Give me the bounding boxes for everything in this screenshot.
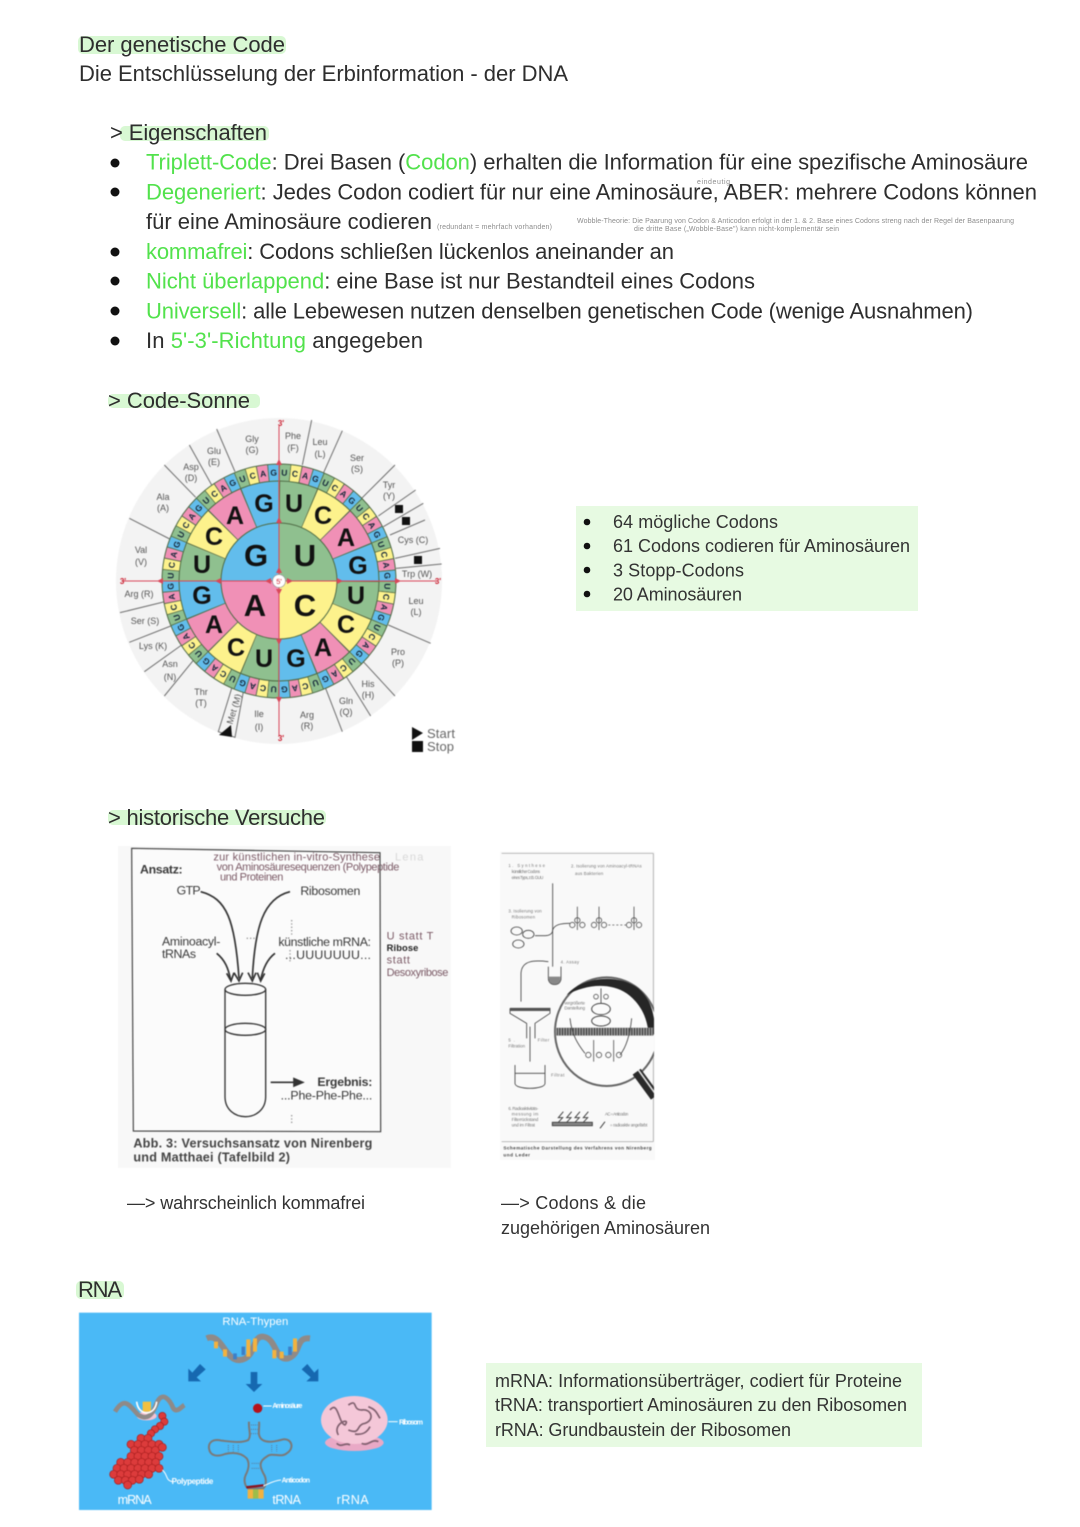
list: properties of the code: [110, 150, 1037, 353]
procedure labels: 6. Radioaktivitäts-: [508, 1106, 539, 1111]
amino acid labels: (R): [301, 721, 313, 731]
speckles: [247, 920, 292, 1123]
tRNA cloverleaf: Anticodon: [282, 1477, 310, 1484]
third base letters: A: [166, 593, 177, 601]
axis cross: 3': [120, 577, 126, 586]
third base letters: [165, 467, 393, 695]
amino acid labels: Met (M): [225, 693, 243, 725]
amino acid labels: (L): [314, 449, 326, 459]
tRNA symbols: [570, 907, 642, 930]
amino acid labels: Tyr: [383, 480, 395, 490]
second base letters: C: [227, 634, 245, 662]
experiment labels: ...Phe-Phe-Phe...: [281, 1089, 372, 1103]
third base letters: C: [360, 511, 372, 522]
third base letters: A: [381, 561, 392, 569]
axis cross: 3': [278, 734, 284, 743]
handwritten note on synthesis: von Aminosäuresequenzen (Polypeptide: [217, 862, 399, 874]
third base letters: A: [186, 511, 198, 522]
third base letters: C: [218, 668, 228, 680]
third base letters: G: [280, 684, 288, 695]
handwritten note on synthesis: zur künstlichen in-vitro-Synthese: [213, 852, 380, 864]
panel: codon counts: 20 Aminosäuren: [613, 584, 742, 604]
third base letters: A: [291, 683, 299, 694]
amino acid labels: (T): [195, 698, 207, 708]
heading: historische Versuche: > historische Versuche: [108, 805, 325, 830]
figure caption: Abb. 3: Versuchsansatz von Nirenberg: [133, 1136, 372, 1150]
third base letters: C: [166, 561, 177, 569]
experiment labels: Ergebnis:: [317, 1075, 372, 1089]
procedure labels: [503, 863, 652, 1157]
amino acid labels: Leu: [408, 596, 424, 606]
rRNA ribosome: Ribosom: [399, 1418, 423, 1427]
amino acid labels: (F): [287, 443, 299, 453]
amino acid labels: Thr: [194, 687, 208, 697]
magnifying glass: [555, 977, 658, 1097]
third base letters: G: [371, 529, 383, 540]
second base letters: G: [192, 582, 212, 610]
tRNA cloverleaf: [209, 1403, 310, 1499]
labels: mRNA, tRNA, rRNA: rRNA: [337, 1493, 369, 1507]
handwritten note: ribose: U statt T: [387, 930, 434, 942]
third base letters: G: [193, 502, 205, 514]
procedure labels: messung im: [512, 1112, 539, 1117]
mRNA with ribosome and polypeptide: [110, 1397, 214, 1489]
list: properties of the code: Nicht überlappend: eine Base ist nur Bestandteil eines Codons: [146, 268, 755, 294]
second base letters: A: [314, 634, 332, 662]
labels: mRNA, tRNA, rRNA: mRNA: [118, 1493, 152, 1507]
third base letters: G: [375, 613, 387, 623]
third base letters: G: [270, 467, 278, 478]
panel: codon counts: 64 mögliche Codons: [613, 512, 778, 532]
third base letters: C: [330, 482, 340, 494]
third base letters: U: [320, 477, 330, 489]
legend: start and stop: [412, 726, 455, 754]
experiment labels: Ansatz:: [140, 862, 183, 876]
panel: RNA types: tRNA: transportiert Aminosäuren zu den Ribosomen: [495, 1395, 907, 1415]
procedure labels: Filtrat: [551, 1072, 565, 1077]
third base letters: C: [259, 683, 267, 694]
axis cross: 3': [435, 577, 441, 586]
third base letters: C: [379, 550, 390, 559]
experiment labels: Aminoacyl-: [162, 934, 220, 948]
procedure labels: und Leder: [503, 1152, 530, 1157]
subtitle: Die Entschlüsselung der Erbinformation - der DNA: [79, 61, 568, 86]
panel: codon counts: [576, 506, 918, 611]
arrow note: kommafrei: —> wahrscheinlich kommafrei: [127, 1193, 365, 1213]
handwritten note: ribose: Ribose: [387, 943, 418, 953]
RNA strand: [207, 1337, 310, 1360]
third base letters: U: [228, 673, 238, 685]
third base letters: C: [248, 470, 257, 481]
amino acid labels: (A): [157, 503, 169, 513]
procedure labels: Filterrückstand: [512, 1117, 539, 1122]
handwritten note: ribose: [387, 930, 448, 979]
experiment labels: künstliche mRNA:: [278, 935, 371, 949]
procedure labels: 3. Isolierung von: [508, 908, 542, 913]
third base letters: C: [291, 468, 299, 479]
mRNA with ribosome and polypeptide: Polypeptide: [172, 1477, 214, 1486]
amino acid labels: Gln: [339, 696, 353, 706]
handwritten note on synthesis: [213, 852, 424, 884]
amino acid labels: Arg: [300, 710, 314, 720]
handwritten notes: [437, 179, 1014, 233]
first base letters: [244, 538, 316, 623]
labels: mRNA, tRNA, rRNA: tRNA: [272, 1493, 302, 1507]
third base letters: G: [227, 477, 238, 489]
amino acid labels: (Y): [383, 491, 395, 501]
labels: mRNA, tRNA, rRNA: [118, 1493, 369, 1507]
second base letters: G: [254, 490, 274, 518]
outer amino acid dividers: [120, 420, 442, 737]
third base letters: A: [379, 603, 390, 612]
amino acid labels: (L): [410, 607, 422, 617]
third base letters: U: [375, 540, 387, 549]
third base letters: C: [366, 632, 378, 642]
third base letters: G: [311, 473, 321, 485]
amino acid labels: Cys (C): [398, 535, 428, 545]
third base letters: G: [175, 622, 187, 633]
third base letters: G: [237, 677, 247, 689]
chart: code sun: [116, 418, 455, 754]
amino acid labels: (H): [362, 690, 374, 700]
procedure labels: eines Typs, z.B. GUU: [512, 875, 543, 880]
second base letters: A: [205, 611, 223, 639]
third base letters: U: [175, 530, 187, 540]
handwritten notes: eindeutig: [697, 179, 730, 186]
third base letters: C: [180, 520, 192, 530]
third base letters: U: [193, 648, 204, 660]
third base letters: G: [171, 539, 183, 549]
third base letters: A: [259, 468, 267, 479]
procedure labels: künstlicher Codons: [512, 869, 540, 874]
third base letters: U: [281, 467, 288, 478]
procedure labels: 4. Assay: [561, 960, 580, 965]
amino acid labels: His: [362, 679, 375, 689]
test tube: [225, 983, 266, 1117]
axis cross: [120, 419, 441, 743]
axis cross: 3': [278, 419, 284, 428]
procedure labels: Filter: [538, 1038, 550, 1043]
amino acid labels: Ile: [254, 709, 264, 719]
experiment labels: ...UUUUUUU...: [285, 948, 371, 962]
rings: [162, 464, 396, 698]
amino acid labels: [124, 431, 432, 737]
third base letters: A: [301, 470, 310, 481]
second base letters: G: [286, 645, 306, 673]
radioactive measurement: [552, 1112, 605, 1128]
figure: Nirenberg and Matthaei experiment: [118, 846, 451, 1168]
procedure labels: = radioaktiv angefärbt: [610, 1123, 648, 1128]
third base letters: C: [338, 662, 349, 674]
panel: RNA types: mRNA: Informationsüberträger, codiert für Proteine: [495, 1371, 902, 1391]
amino acid labels: (D): [185, 473, 197, 483]
third base letters: U: [311, 677, 320, 689]
list: properties of the code: kommafrei: Codons schließen lückenlos aneinander an: [146, 239, 674, 264]
amino acid labels: Ala: [156, 492, 170, 502]
list: properties of the code: Degeneriert: Jedes Codon codiert für nur eine Aminosäure, ABER: mehrere Codons können: [146, 180, 1037, 204]
third base letters: A: [180, 632, 192, 642]
second base letters: C: [314, 502, 332, 530]
arrow note: codons and amino acids: zugehörigen Aminosäuren: [501, 1218, 710, 1238]
amino acid labels: Trp (W): [402, 569, 432, 579]
amino acid labels: Gly: [245, 434, 259, 444]
amino acid labels: (G): [246, 445, 258, 455]
second base letters: U: [255, 645, 273, 673]
panel: RNA types: [486, 1363, 922, 1447]
third base letters: C: [301, 681, 310, 692]
amino acid labels: (S): [351, 464, 363, 474]
second base letters: C: [205, 523, 223, 551]
first base letters: U: [294, 538, 316, 573]
amino acid labels: (E): [208, 457, 220, 467]
amino acid labels: Asn: [162, 659, 178, 669]
handwritten note on synthesis: Lena: [395, 852, 424, 864]
procedure labels: AC = Anticodon: [605, 1112, 629, 1117]
amino acid labels: Lys (K): [139, 641, 167, 651]
second base letters: A: [226, 502, 244, 530]
third base letters: G: [320, 673, 331, 685]
third base letters: C: [209, 488, 220, 500]
figure caption: und Matthaei (Tafelbild 2): [133, 1151, 290, 1165]
procedure labels: 2. Isolierung von Aminoacyl-tRNAs: [571, 864, 642, 869]
handwritten note on synthesis: und Proteinen: [220, 872, 283, 884]
third base letters: A: [209, 662, 220, 674]
handwritten note: ribose: statt: [387, 954, 410, 966]
handwritten notes: Wobble-Theorie: Die Paarung von Codon & Anticodon erfolgt in der 1. & 2. Base eines Codons streng nach der Regel der Basenpaarung: [577, 218, 1014, 225]
third base letters: U: [200, 495, 212, 506]
third base letters: A: [360, 640, 372, 651]
experiment labels: GTP: [177, 883, 201, 897]
second base letters: [192, 490, 368, 673]
arrow note: codons and amino acids: [501, 1193, 710, 1238]
third base letters: U: [346, 656, 358, 667]
amino acid labels: Arg (R): [124, 589, 154, 599]
third base letters: A: [330, 668, 340, 680]
panel: RNA types: rRNA: Grundbaustein der Ribosomen: [495, 1420, 791, 1440]
amino acid labels: (I): [255, 722, 263, 732]
amino acid labels: (P): [392, 658, 404, 668]
figure: Nirenberg and Leder procedure: [500, 852, 658, 1160]
procedure labels: 5.: [508, 1038, 515, 1043]
third base letters: A: [248, 681, 257, 692]
label: RNA types: RNA-Thypen: [222, 1316, 288, 1328]
first base letters: C: [294, 588, 316, 623]
third base letters: G: [346, 495, 358, 507]
amino acid labels: Val: [135, 545, 147, 555]
procedure labels: 1. Synthese: [508, 863, 546, 868]
magnifying glass: Darstellung: [564, 1006, 586, 1011]
third base letters: C: [381, 593, 392, 601]
panel: codon counts: 61 Codons codieren für Aminosäuren: [613, 536, 910, 556]
third base letters: G: [165, 582, 176, 590]
second base letters: U: [285, 490, 303, 518]
magnifying glass: vergrößerte: [564, 1000, 586, 1005]
amino acid labels: Leu: [312, 437, 328, 447]
procedure labels: aus Bakterien: [575, 871, 604, 876]
procedure labels: Schematische Darstellung des Verfahrens von Nirenberg: [503, 1146, 652, 1151]
second base letters: A: [337, 524, 355, 552]
list: properties of the code: Universell: alle Lebewesen nutzen denselben genetischen Code (wenige Ausnahmen): [146, 298, 973, 324]
arrow note: codons and amino acids: —> Codons & die: [501, 1193, 646, 1213]
experiment labels: tRNAs: [162, 947, 196, 961]
third base letters: U: [371, 622, 383, 632]
third base letters: C: [168, 603, 179, 612]
amino acid labels: Phe: [285, 431, 301, 441]
flow lines and glassware: [510, 883, 570, 1088]
list: properties of the code: Triplett-Code: Drei Basen (Codon) erhalten die Information für eine spezifische Aminosäure: [146, 150, 1028, 174]
second base letters: U: [347, 582, 365, 610]
axis cross: 5': [276, 577, 282, 586]
curved arrows into tube: [201, 892, 303, 1086]
panel: codon counts: 3 Stopp-Codons: [613, 560, 744, 580]
experiment labels: [140, 862, 372, 1103]
third base letters: A: [168, 550, 179, 559]
rRNA ribosome: [321, 1396, 423, 1451]
title: Der genetische Code: [79, 32, 285, 57]
list: properties of the code: für eine Aminosäure codieren: [146, 209, 432, 234]
handwritten note: ribose: Desoxyribose: [387, 967, 448, 979]
legend: start and stop: Start: [427, 726, 455, 741]
figure caption: [133, 1136, 372, 1165]
third base letters: U: [354, 502, 365, 514]
handwritten notes: die dritte Base („Wobble-Base") kann nicht-komplementär sein: [634, 226, 839, 233]
third base letters: G: [382, 572, 393, 580]
third base letters: U: [382, 583, 393, 590]
procedure labels: Ribosomen: [512, 914, 536, 919]
procedure labels: und im Filtrat: [512, 1123, 536, 1128]
third base letters: G: [200, 655, 212, 667]
amino acid labels: (Q): [340, 707, 352, 717]
tRNA cloverleaf: Aminosäure: [272, 1403, 302, 1410]
third base letters: U: [165, 572, 176, 579]
arrows to the three RNA types: [188, 1364, 318, 1392]
amino acid labels: Ser (S): [131, 616, 159, 626]
second base letters: U: [193, 551, 211, 579]
amino acid labels: Glu: [207, 446, 221, 456]
third base letters: G: [353, 648, 365, 660]
handwritten notes: (redundant = mehrfach vorhanden): [437, 224, 552, 231]
third base letters: A: [338, 488, 349, 500]
list: properties of the code: In 5'-3'-Richtung angegeben: [146, 328, 423, 353]
illustration: RNA types: [79, 1313, 432, 1510]
third base letters: U: [171, 613, 183, 622]
third base letters: U: [238, 473, 247, 485]
heading: Eigenschaften: > Eigenschaften: [110, 120, 267, 145]
amino acid labels: Ser: [350, 453, 364, 463]
first base letters: G: [244, 538, 268, 573]
third base letters: A: [218, 482, 228, 494]
amino acid labels: (V): [135, 557, 147, 567]
amino acid labels: Pro: [391, 647, 405, 657]
amino acid labels: Asp: [183, 462, 199, 472]
third base letters: C: [186, 640, 198, 651]
heading: RNA: RNA: [78, 1277, 122, 1302]
amino acid labels: (N): [164, 672, 176, 682]
second base letters: G: [348, 552, 368, 580]
third base letters: A: [366, 520, 378, 530]
experiment labels: Ribosomen: [300, 884, 360, 898]
legend: start and stop: Stop: [427, 739, 454, 754]
procedure labels: Filtration: [508, 1044, 526, 1049]
heading: Code-Sonne: > Code-Sonne: [108, 388, 250, 413]
stop markers: [395, 505, 422, 564]
first base letters: A: [244, 588, 266, 623]
third base letters: U: [270, 684, 277, 695]
second base letters: C: [337, 611, 355, 639]
